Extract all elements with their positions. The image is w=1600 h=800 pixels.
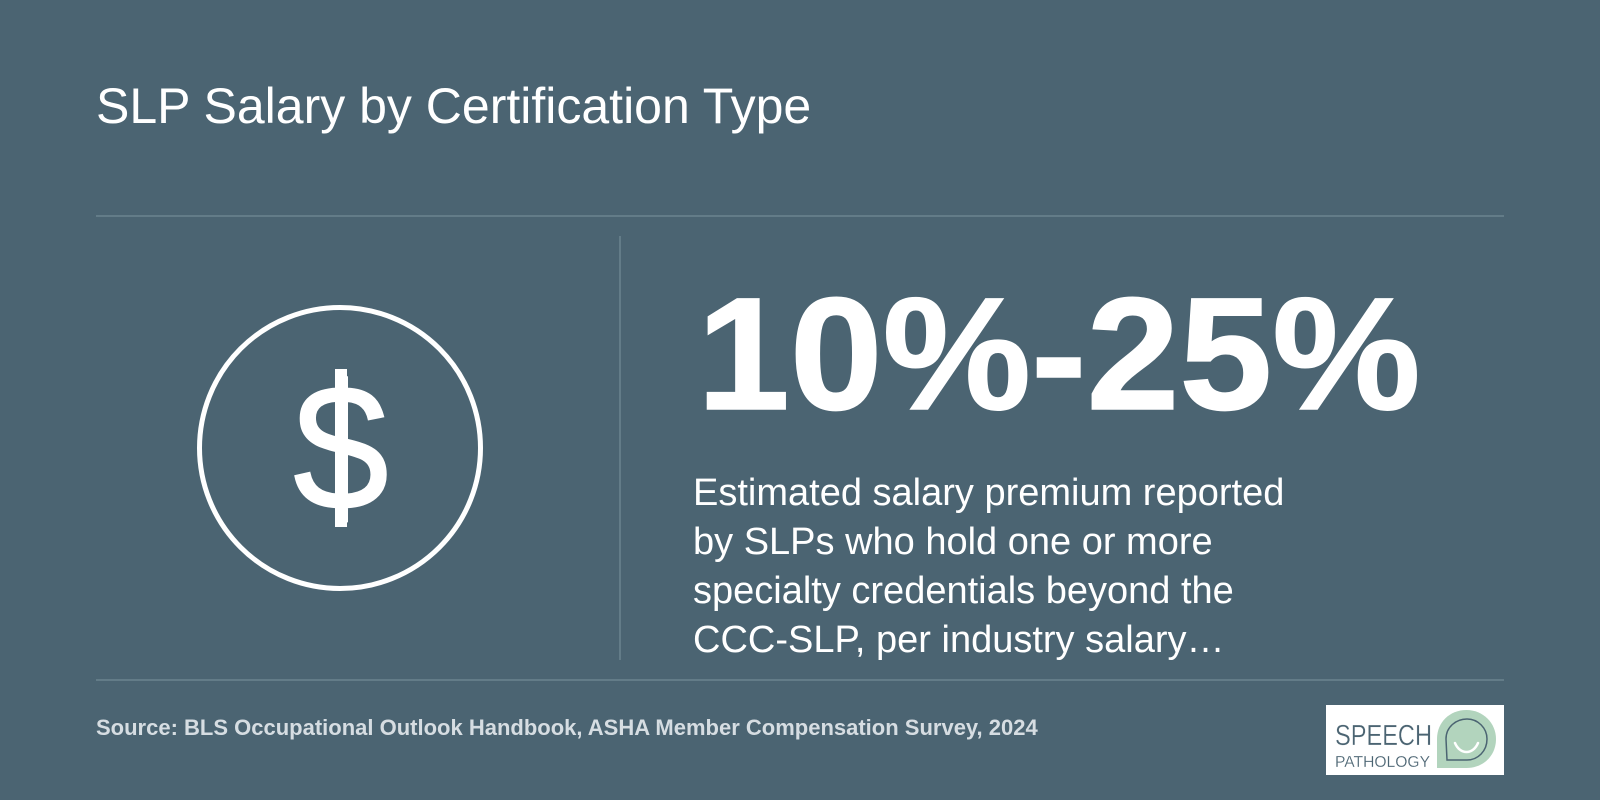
logo: Speech Pathology: SPEECH	[1335, 720, 1432, 752]
big statistic: 10%-25%	[697, 264, 1421, 443]
logo: Speech Pathology	[1326, 705, 1504, 775]
icon: dollar sign in circle	[197, 305, 483, 591]
source note: Source: BLS Occupational Outlook Handbook, ASHA Member Compensation Survey, 2024	[96, 715, 1038, 740]
description text: specialty credentials beyond the	[693, 570, 1234, 612]
description text: by SLPs who hold one or more	[693, 521, 1213, 563]
title: SLP Salary by Certification Type	[96, 78, 811, 134]
description text: CCC-SLP, per industry salary…	[693, 619, 1224, 661]
icon: dollar sign in circle: $	[293, 348, 389, 547]
logo: Speech Pathology: PATHOLOGY	[1335, 754, 1430, 771]
description text: Estimated salary premium reported	[693, 472, 1284, 514]
description text	[693, 472, 1284, 661]
